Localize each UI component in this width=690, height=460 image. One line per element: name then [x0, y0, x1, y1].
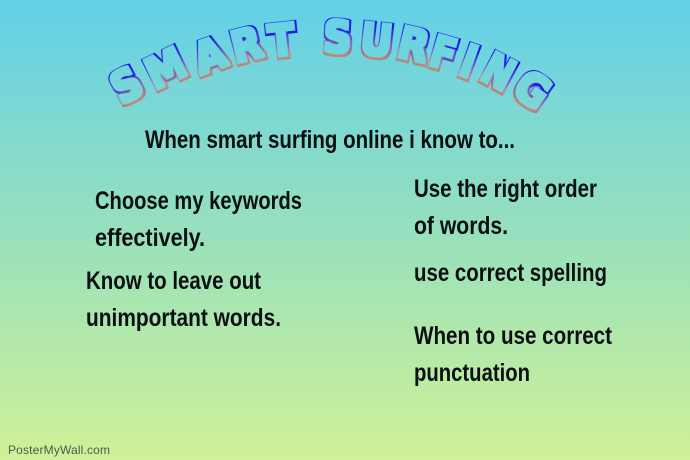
watermark: PosterMyWall.com [8, 443, 110, 457]
title: SMART SURFiNG arched: F [425, 28, 462, 82]
text block: word order [414, 175, 597, 240]
text block: punctuation: When to use correct [414, 322, 613, 350]
text block: spelling: use correct spelling [414, 259, 607, 287]
title: SMART SURFiNG arched: A [188, 28, 233, 85]
title: SMART SURFiNG arched: N [473, 45, 522, 103]
text block: leave out words: Know to leave out [86, 267, 262, 295]
title: SMART SURFiNG arched: T [266, 15, 298, 68]
title: SMART SURFiNG arched [103, 13, 560, 121]
text block: word order: of words. [414, 212, 508, 240]
title: SMART SURFiNG arched: S [322, 13, 353, 64]
title: SMART SURFiNG arched: M [138, 38, 195, 100]
text block: word order: Use the right order [414, 175, 597, 203]
title: SMART SURFiNG arched: R [227, 18, 268, 74]
title: SMART SURFiNG arched: U [358, 15, 395, 68]
text block: punctuation [414, 322, 613, 387]
text block: choose keywords: Choose my keywords [95, 187, 302, 215]
title: SMART SURFiNG arched: G [505, 61, 560, 121]
text block: choose keywords: effectively. [95, 224, 205, 252]
text block: choose keywords [95, 187, 302, 252]
title: SMART SURFiNG arched: i [454, 38, 483, 89]
title: SMART SURFiNG arched: S [103, 58, 152, 115]
text block: punctuation: punctuation [414, 359, 530, 387]
text block: leave out words: unimportant words. [86, 304, 281, 332]
title: SMART SURFiNG arched: R [393, 19, 434, 74]
text block: leave out words [86, 267, 281, 332]
subtitle: When smart surfing online i know to... [145, 126, 515, 154]
